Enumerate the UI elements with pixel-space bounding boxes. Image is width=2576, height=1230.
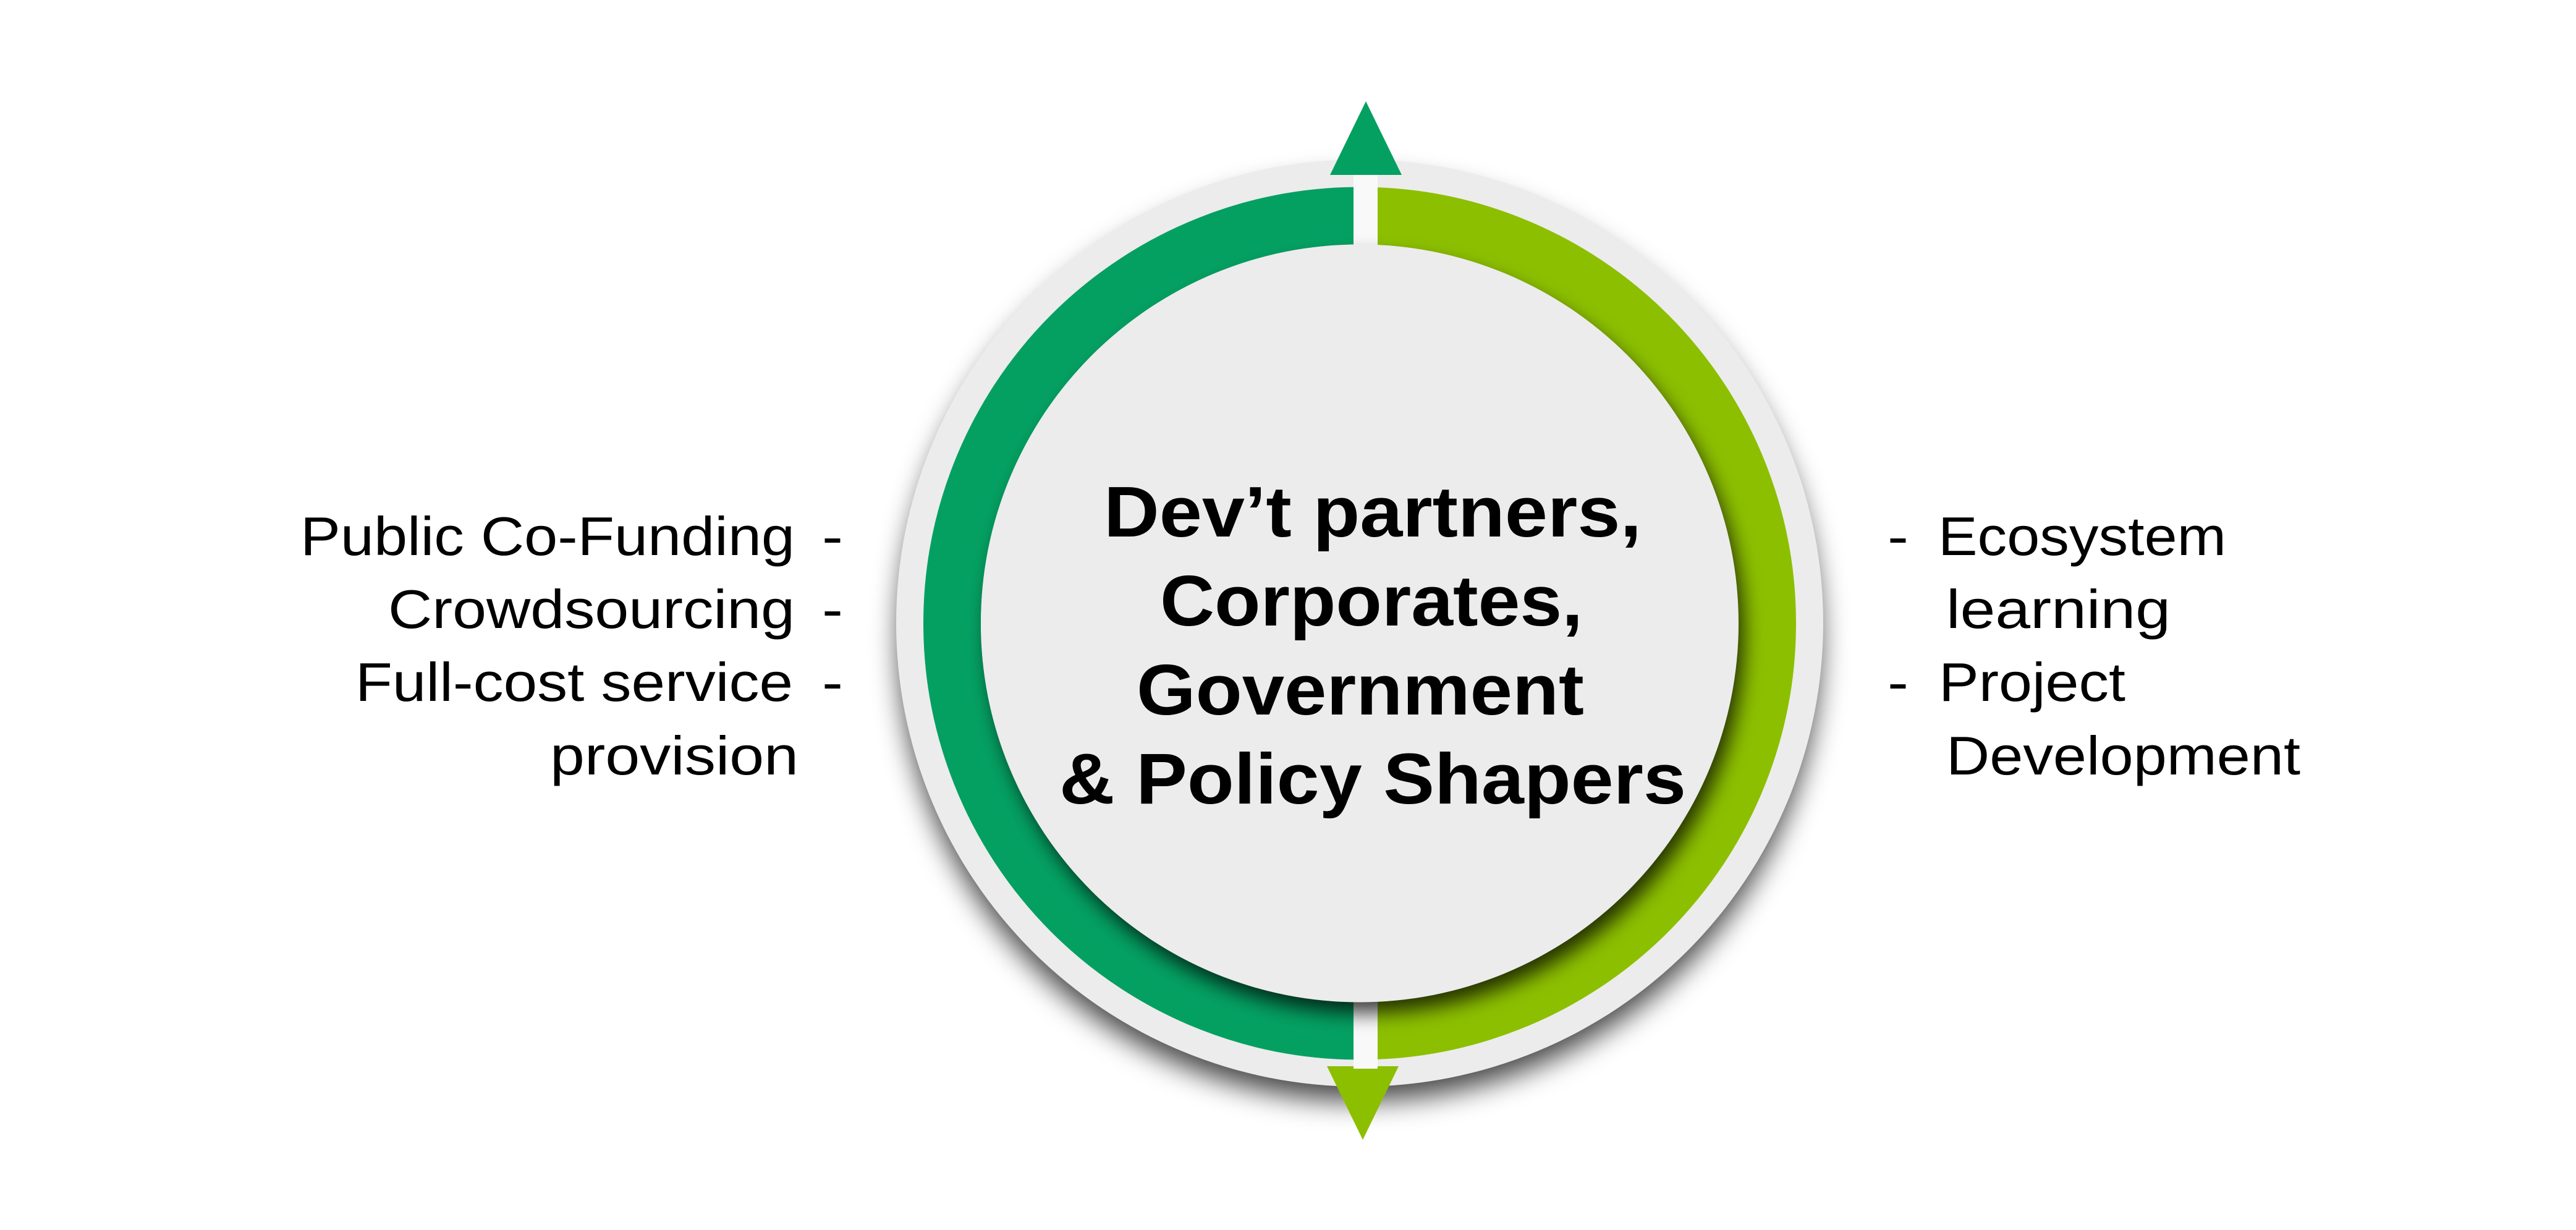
left list: funding sources: provision (550, 725, 799, 786)
inner grey disc (981, 245, 1739, 1003)
left list: funding sources: Public Co-Funding (300, 506, 795, 567)
left list: funding sources: - (822, 651, 843, 713)
right list: activities: Project (1939, 651, 2125, 713)
left list: funding sources: Crowdsourcing (388, 579, 795, 640)
right list: activities: - (1888, 651, 1909, 713)
outer grey disc (896, 159, 1823, 1087)
left list: funding sources: - (822, 506, 843, 567)
left arc: green (923, 187, 1354, 1059)
right list: activities: - (1888, 506, 1909, 567)
left list: funding sources: - (822, 579, 843, 640)
center heading: Corporates, (1160, 561, 1583, 641)
left list: funding sources: Full-cost service (355, 651, 793, 713)
center heading: & Policy Shapers (1059, 739, 1686, 819)
right list: activities: Ecosystem (1938, 506, 2226, 567)
right arc: lime (1378, 187, 1796, 1059)
inner disc shadow (988, 258, 1743, 1013)
center heading (1059, 472, 1686, 819)
left list: funding sources (300, 506, 843, 786)
right list: activities: learning (1946, 579, 2171, 640)
arrow: up, green head (1330, 101, 1402, 175)
arrow: down, lime head (1327, 1066, 1399, 1140)
outer disc shadow (899, 180, 1820, 1101)
diagram: circular cycle (896, 101, 1823, 1140)
right list: activities: Development (1946, 725, 2300, 786)
right list: activities (1888, 506, 2300, 786)
center heading: Dev’t partners, (1104, 472, 1642, 552)
white connector bar (1354, 175, 1378, 1069)
center heading: Government (1137, 650, 1584, 730)
